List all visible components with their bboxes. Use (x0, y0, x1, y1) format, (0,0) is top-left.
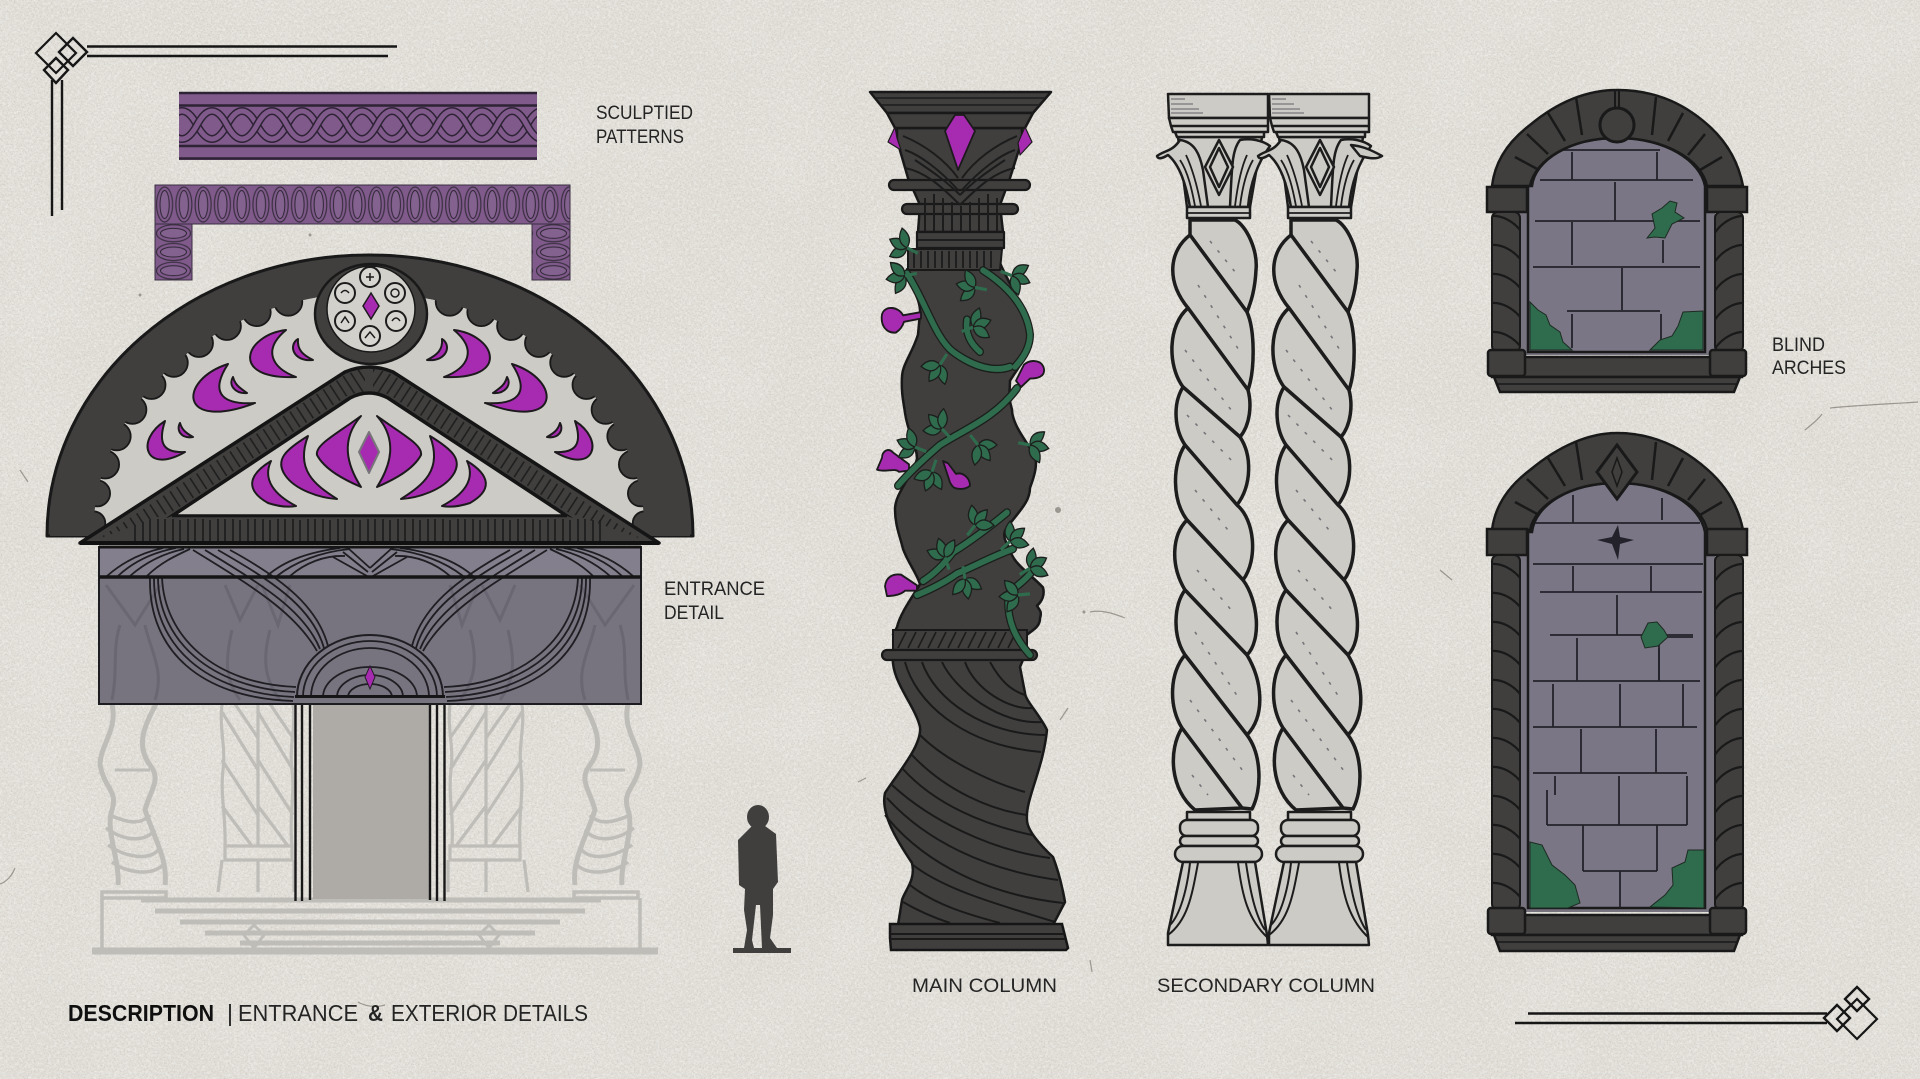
secondary column pair (1157, 94, 1382, 945)
sill (1492, 915, 1742, 935)
scalloped inner edge (81, 288, 657, 535)
main column (870, 92, 1068, 950)
moss patches (1530, 201, 1703, 350)
arch stones (1492, 433, 1743, 530)
label: entrance detail: ENTRANCE (664, 579, 765, 600)
title line: EXTERIOR DETAILS (391, 1000, 588, 1026)
label: secondary column: SECONDARY COLUMN (1157, 976, 1375, 997)
sculpted pattern: braid band (167, 92, 557, 160)
blind arch: tall window (1487, 433, 1747, 951)
sill (1492, 357, 1742, 377)
label: blind arches (1772, 335, 1846, 379)
label: main column: MAIN COLUMN (912, 976, 1057, 997)
title line (68, 1000, 588, 1026)
title line: ENTRANCE (238, 1000, 358, 1026)
title line: DESCRIPTION (68, 1000, 214, 1026)
arch stones (1492, 90, 1743, 186)
main column: crystal gems (945, 115, 975, 170)
secondary column: right (1258, 94, 1371, 945)
brick lines (1533, 495, 1703, 908)
medallion (315, 264, 427, 364)
secondary column: rings and flared base (1168, 812, 1268, 945)
triangular pediment (80, 367, 659, 543)
label: sculpted patterns (596, 103, 693, 148)
main column: upper twisted shaft (893, 263, 1044, 635)
impost blocks (1487, 187, 1527, 212)
corner ornament: bottom right (1515, 987, 1877, 1039)
main column: capital (870, 92, 1051, 270)
moss patches (1530, 622, 1704, 908)
label: entrance detail: DETAIL (664, 603, 724, 624)
main column: flowers (877, 308, 1044, 596)
sculpted pattern: egg moulding frame (155, 185, 570, 280)
pediment flame ornaments (252, 416, 486, 507)
main column: climbing vines (898, 270, 1033, 655)
title line: & (368, 1000, 383, 1026)
entrance: arched pediment (47, 255, 693, 543)
main column: lower fluted shaft (884, 650, 1065, 925)
label: entrance detail (664, 579, 765, 624)
entrance: doorway (296, 703, 444, 901)
twisted jambs (1492, 212, 1520, 352)
twisted jambs (1492, 555, 1520, 910)
secondary column: right volute tip (1351, 145, 1382, 158)
main column: plinth (890, 924, 1068, 950)
scale figure silhouette (733, 805, 791, 953)
impost blocks (1487, 529, 1527, 555)
wall crack (1597, 525, 1634, 560)
brick lines (1533, 150, 1700, 348)
crescent ornaments (148, 330, 592, 460)
label: sculpted patterns: SCULPTIED (596, 103, 693, 124)
main column: torus ring (882, 630, 1037, 660)
title line: | (227, 1000, 233, 1026)
entrance: lintel panel with arcs (99, 547, 641, 704)
corner ornament: top left (36, 33, 397, 216)
entrance: ghost lower columns and steps (92, 704, 658, 951)
dark arch band over scallops (50, 258, 690, 536)
label: blind arches: ARCHES (1772, 358, 1846, 379)
blind arch: small window (1487, 90, 1747, 392)
label: blind arches: BLIND (1772, 335, 1825, 356)
secondary column: left (1157, 94, 1270, 945)
secondary column: capital (1157, 94, 1270, 218)
main column: leaf clusters (882, 222, 1055, 616)
label: sculpted patterns: PATTERNS (596, 127, 684, 148)
